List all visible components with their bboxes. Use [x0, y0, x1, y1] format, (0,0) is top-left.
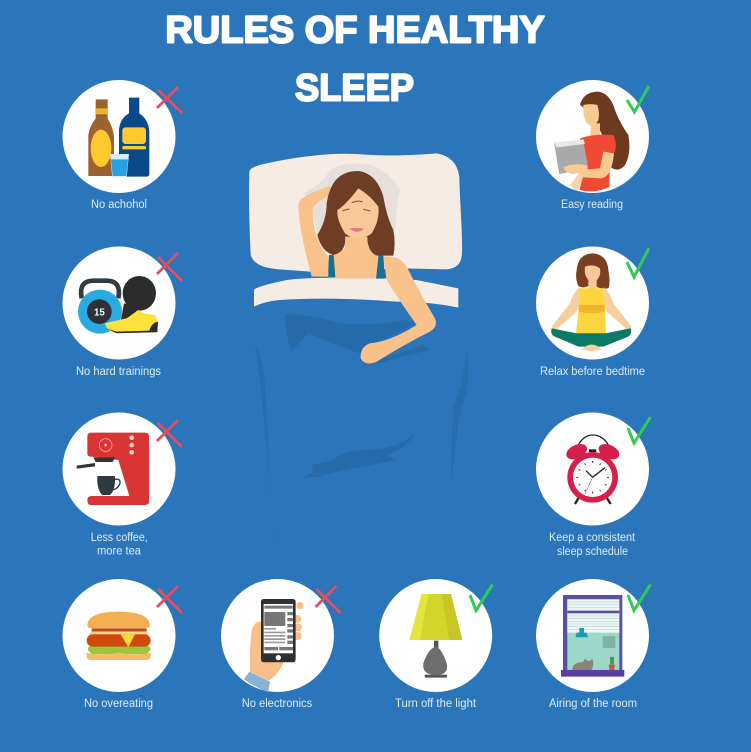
icon: alarm clock	[564, 435, 622, 504]
panel: no hard trainings	[62, 246, 182, 378]
label: No hard trainings	[76, 366, 161, 378]
icon: kettlebell and shoe: 15	[94, 307, 105, 318]
icon: green check	[628, 584, 650, 610]
panel: airing of the room	[536, 579, 650, 710]
icon: bottles	[88, 98, 149, 177]
raised arm	[298, 186, 332, 277]
label: Airing of the room	[549, 698, 637, 710]
label: Turn off the light	[395, 698, 477, 710]
lower arm	[361, 256, 436, 364]
label: Keep a consistent	[549, 532, 636, 544]
icon: red cross	[157, 87, 182, 113]
blanket top fold	[254, 278, 458, 308]
icon: red cross	[157, 586, 182, 613]
pillow shadow	[303, 163, 400, 233]
icon: woman meditating	[551, 253, 632, 351]
panel: no overeating	[62, 579, 182, 710]
panel: no alcohol	[62, 80, 182, 211]
straps	[328, 255, 385, 279]
title: SLEEP	[295, 66, 414, 109]
panel: relax before bedtime	[536, 246, 649, 378]
label: Easy reading	[561, 199, 623, 211]
icon: woman reading	[554, 92, 629, 192]
panel: keep a consistent sleep schedule: sleep schedule	[557, 546, 628, 558]
icon: green check	[627, 248, 649, 277]
facial features	[343, 201, 371, 211]
panel: turn off the light	[379, 579, 492, 710]
icon: hand holding phone	[244, 599, 304, 692]
label: No overeating	[84, 698, 153, 710]
panel: no electronics	[221, 579, 340, 710]
label: No electronics	[242, 698, 312, 710]
sleeping woman in bed	[249, 153, 468, 563]
icon: red cross	[316, 586, 340, 613]
icon: window	[561, 595, 624, 677]
hair	[317, 171, 395, 256]
panel: easy reading	[536, 80, 649, 211]
chest and neck	[328, 235, 385, 278]
panel: keep a consistent sleep schedule	[536, 412, 650, 558]
label: Less coffee,	[91, 532, 148, 544]
icon: lamp	[409, 594, 462, 678]
blanket folds	[255, 314, 468, 563]
label: No achohol	[91, 199, 147, 211]
panel: less coffee	[62, 412, 182, 558]
title	[165, 10, 545, 109]
title: RULES OF HEALTHY	[165, 10, 545, 52]
icon: red cross	[157, 420, 182, 447]
icon: red cross	[157, 253, 182, 281]
face	[337, 188, 379, 238]
icon: green check	[470, 584, 492, 610]
label: Relax before bedtime	[540, 366, 645, 378]
icon: burger	[87, 612, 151, 660]
pillow	[249, 153, 462, 272]
icon: green check	[628, 417, 650, 443]
icon: green check	[627, 86, 649, 112]
icon: coffee machine	[77, 433, 149, 505]
panel: less coffee: more tea	[97, 546, 142, 558]
